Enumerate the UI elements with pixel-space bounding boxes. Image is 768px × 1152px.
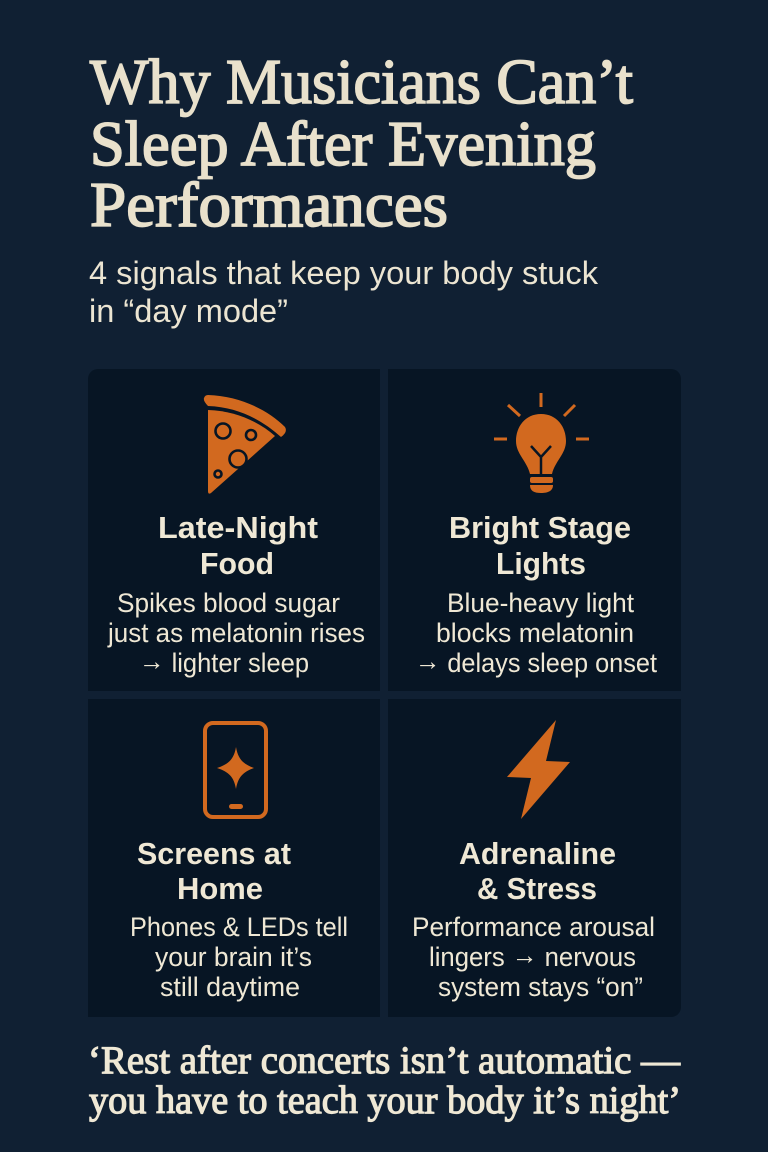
title [90,47,633,240]
panel: bright stage lights [388,369,681,691]
closing quote [88,1039,681,1122]
heading: screens at home [137,836,291,906]
description: adrenaline and stress: lingers [429,942,507,972]
description: adrenaline and stress: → [512,940,537,970]
description: screens at home: your brain it’s [155,942,312,972]
description: adrenaline and stress [412,912,655,1002]
panel: late-night food [88,369,380,691]
heading: screens at home: Home [177,871,263,906]
description: screens at home: Phones & LEDs tell [130,912,348,942]
heading: adrenaline and stress: Adrenaline [459,836,616,871]
description: late-night food: → [139,646,164,676]
description: bright stage lights: Blue-heavy light [447,588,635,618]
description: adrenaline and stress: nervous [537,942,636,972]
description: late-night food: just as melatonin rises [107,618,365,648]
description: adrenaline and stress: Performance arousal [412,912,655,942]
description: bright stage lights: delays sleep onset [440,648,658,678]
heading: bright stage lights: Lights [496,546,586,581]
heading: bright stage lights: Bright Stage [449,510,631,545]
description: screens at home: still daytime [160,972,300,1002]
icon: pizza slice [204,395,286,494]
heading: late-night food: Late-Night [158,510,318,545]
heading: late-night food: Food [200,546,274,581]
title: Sleep After Evening [90,109,596,179]
description: late-night food: lighter sleep [164,648,309,678]
subtitle [89,255,599,329]
heading: adrenaline and stress [459,836,616,906]
heading: late-night food [158,510,318,581]
description: adrenaline and stress: system stays “on” [438,972,643,1002]
heading: adrenaline and stress: & Stress [477,871,597,906]
panel: screens at home [88,699,380,1017]
subtitle: in “day mode” [89,293,288,329]
subtitle: 4 signals that keep your body stuck [89,255,599,291]
title: Performances [90,170,448,240]
panel: adrenaline and stress [388,699,681,1017]
description: late-night food: Spikes blood sugar [117,588,340,618]
icon: phone [205,723,266,817]
description: bright stage lights: blocks melatonin [436,618,634,648]
heading: bright stage lights [449,510,631,581]
closing quote: ‘Rest after concerts isn’t automatic — [88,1039,681,1082]
description: bright stage lights [415,588,658,678]
icon: light bulb [494,393,589,493]
title: Why Musicians Can’t [90,47,633,117]
description: late-night food [107,588,365,678]
icon: lightning bolt [507,720,570,819]
description: screens at home [130,912,348,1002]
heading: screens at home: Screens at [137,836,291,871]
closing quote: you have to teach your body it’s night’ [89,1079,681,1122]
description: bright stage lights: → [415,646,440,676]
